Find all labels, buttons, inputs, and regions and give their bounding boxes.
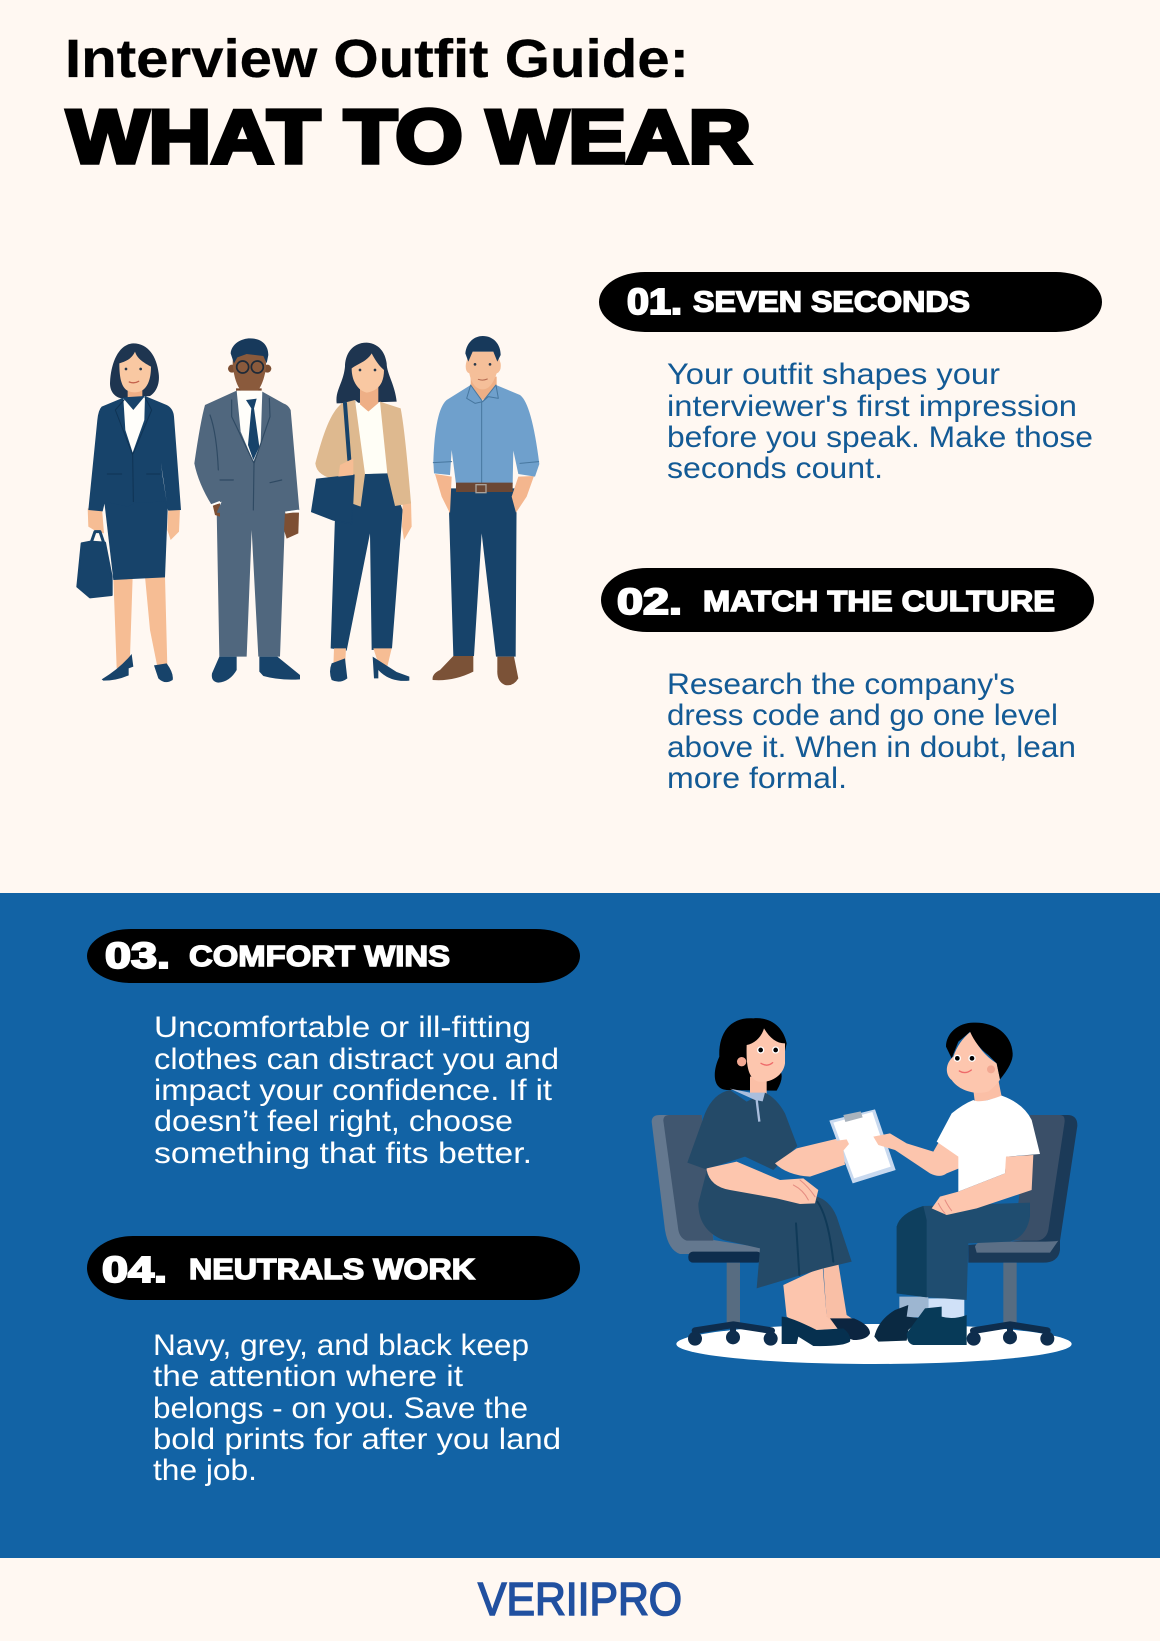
person: man in blue shirt xyxy=(433,336,539,685)
text: section 01 body: seconds count. xyxy=(667,452,883,485)
text: section 04 body: bold prints for after you land xyxy=(153,1423,561,1456)
text: section 03 body: impact your confidence. If it xyxy=(154,1074,552,1107)
hand: woman's hand on clipboard xyxy=(830,1139,849,1165)
person: seated man xyxy=(873,1023,1040,1345)
text: section 04 body: belongs - on you. Save the xyxy=(153,1392,528,1425)
text: section 01 body: interviewer's first impression xyxy=(667,390,1077,423)
text: section 01 body: before you speak. Make those xyxy=(667,421,1093,454)
text: section 03 body: Uncomfortable or ill-fitting xyxy=(154,1011,531,1044)
text: section 02 body: more formal. xyxy=(667,762,847,795)
title xyxy=(65,29,751,178)
person: man in grey suit xyxy=(194,338,300,683)
badge: 04 neutrals work: NEUTRALS WORK xyxy=(189,1254,475,1286)
text: section 02 body: dress code and go one level xyxy=(667,699,1058,732)
badge: 03 comfort wins xyxy=(87,929,580,983)
text: section 03 body: doesn’t feel right, choose xyxy=(154,1105,513,1138)
text: section 02 body xyxy=(667,668,1076,795)
text: section 04 body: the job. xyxy=(153,1454,257,1487)
badge: 04 neutrals work: 04. xyxy=(102,1249,167,1290)
title: Interview Outfit Guide: xyxy=(65,29,689,89)
text: section 01 body: Your outfit shapes your xyxy=(667,358,1000,391)
text: section 04 body: the attention where it xyxy=(153,1360,463,1393)
badge: 01 seven seconds xyxy=(599,272,1102,332)
person: seated woman xyxy=(687,1018,870,1346)
person: woman in beige cardigan xyxy=(312,343,412,682)
illustration: four professionals xyxy=(77,336,539,685)
text: section 04 body: Navy, grey, and black keep xyxy=(153,1329,529,1362)
text: section 03 body xyxy=(154,1011,559,1170)
illustration: two people in an interview xyxy=(652,1018,1077,1364)
badge: 03 comfort wins: COMFORT WINS xyxy=(189,941,450,973)
logo: VERIIPRO: VERIIPRO xyxy=(478,1573,682,1625)
floor ellipse xyxy=(676,1324,1072,1364)
chair: right xyxy=(967,1115,1077,1346)
title: WHAT TO WEAR xyxy=(67,94,751,178)
text: section 04 body xyxy=(153,1329,561,1487)
clipboard xyxy=(829,1109,896,1183)
panel: blue band xyxy=(0,893,1160,1558)
badge: 03 comfort wins: 03. xyxy=(105,935,170,976)
badge: 02 match the culture: 02. xyxy=(617,581,682,622)
text: section 03 body: something that fits better. xyxy=(154,1137,532,1170)
badge: 01 seven seconds: 01. xyxy=(627,281,682,322)
text: section 02 body: Research the company's xyxy=(667,668,1015,701)
badge: 01 seven seconds: SEVEN SECONDS xyxy=(693,286,970,318)
badge: 02 match the culture xyxy=(601,568,1094,632)
badge: 02 match the culture: MATCH THE CULTURE xyxy=(703,586,1055,618)
text: section 01 body xyxy=(667,358,1093,485)
text: section 02 body: above it. When in doubt, lean xyxy=(667,731,1076,764)
person: woman in navy skirt suit xyxy=(77,343,181,682)
chair: left xyxy=(652,1115,778,1346)
text: section 03 body: clothes can distract you and xyxy=(154,1043,559,1076)
badge: 04 neutrals work xyxy=(87,1236,580,1300)
